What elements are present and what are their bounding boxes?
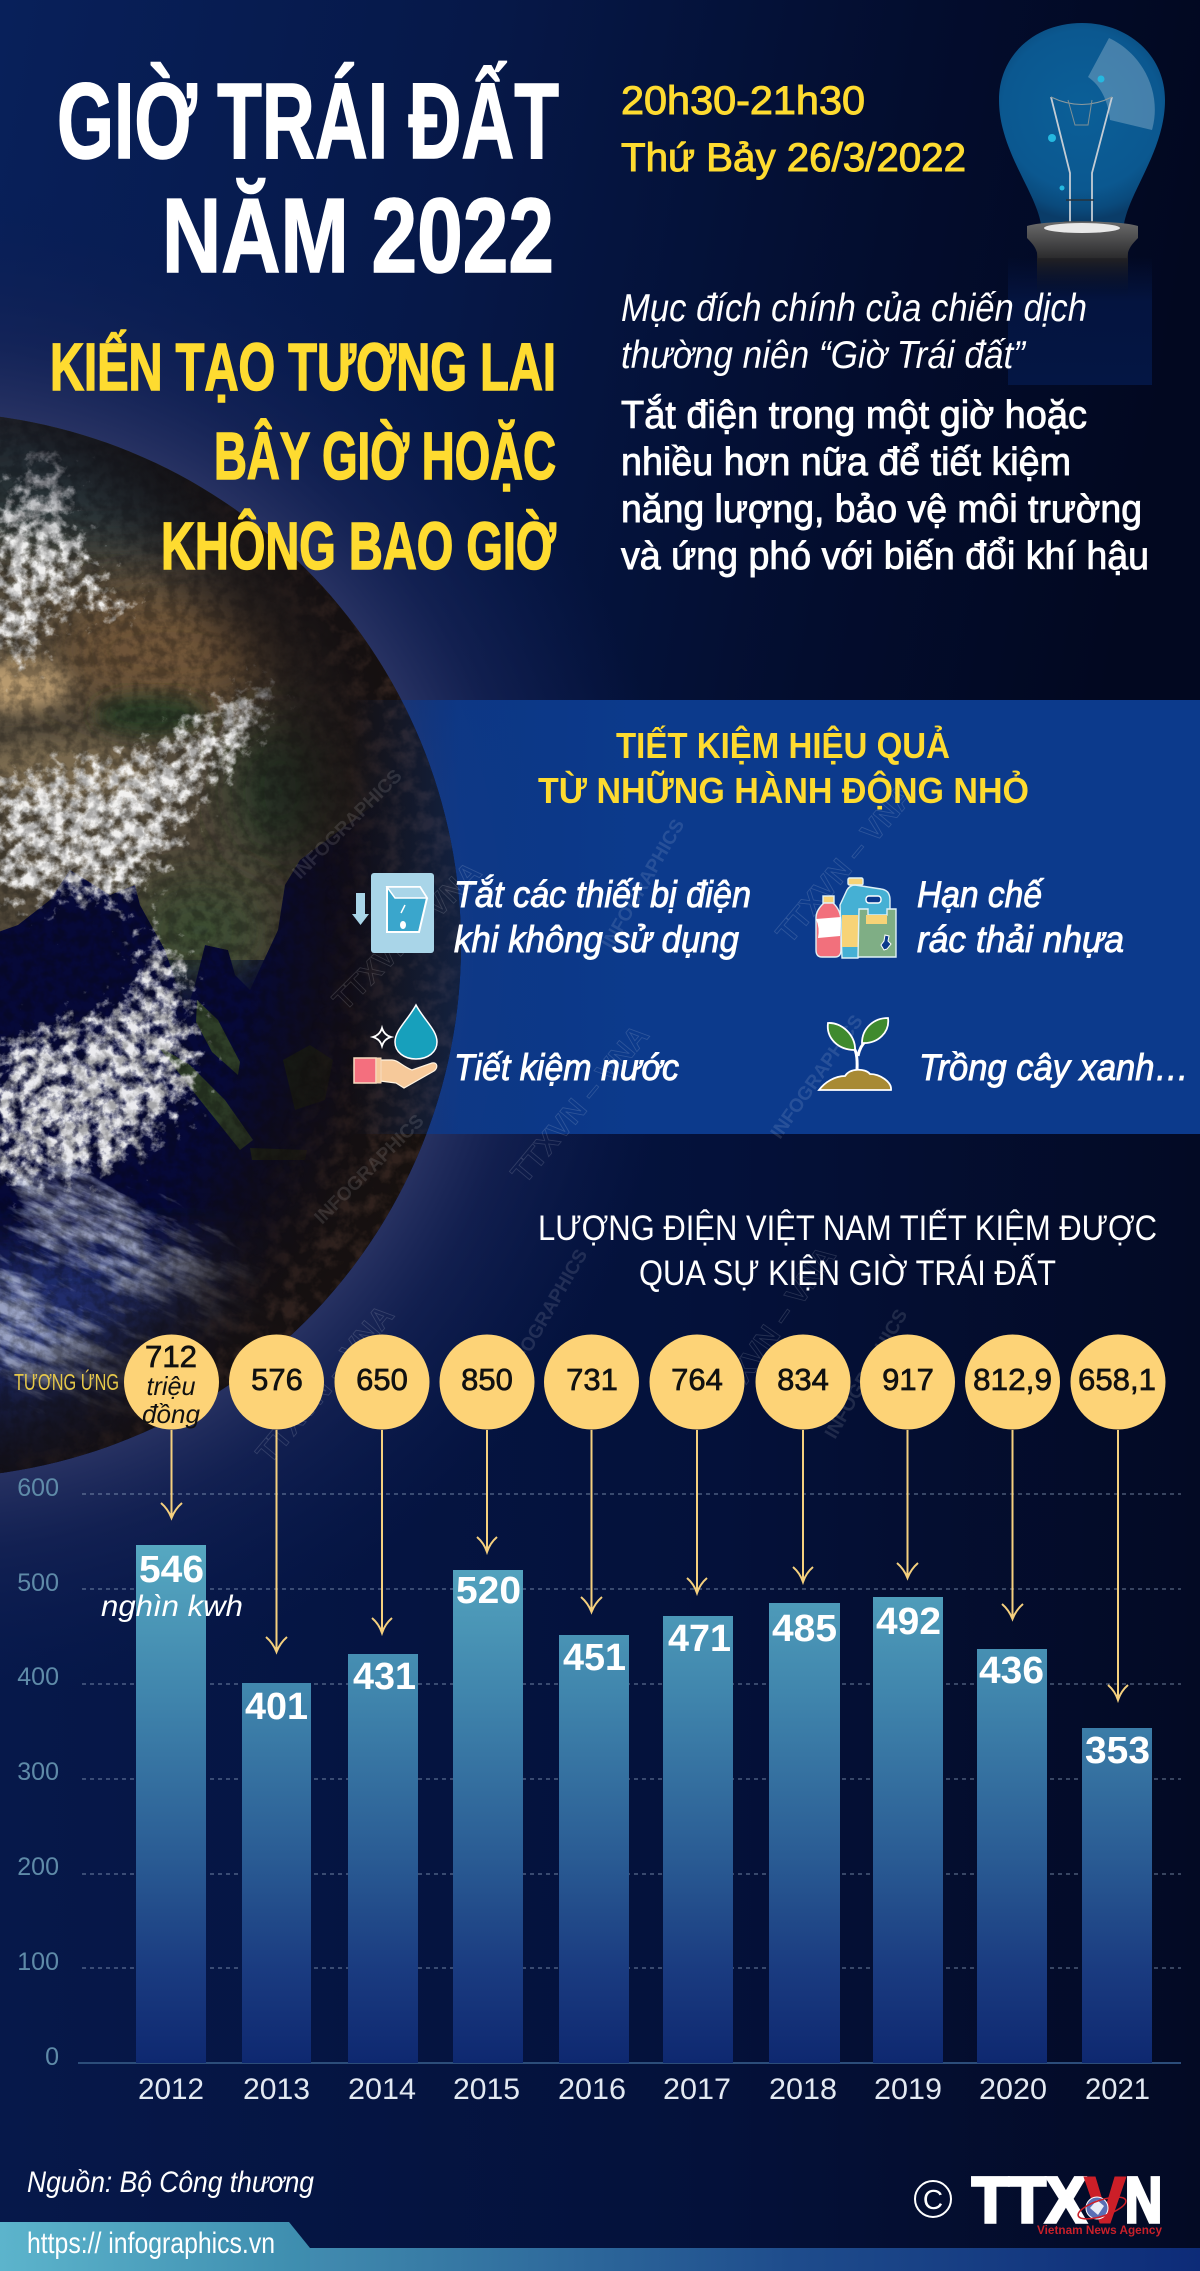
chart title: QUA SỰ KIỆN GIỜ TRÁI ĐẤT <box>639 1253 1056 1293</box>
circle: 2018: 834 <box>777 1362 829 1397</box>
circle: 2017: 764 <box>671 1362 723 1397</box>
y axis labels: 600 <box>17 1474 59 1502</box>
x axis years: 2019 <box>874 2073 942 2106</box>
logo: TTXVN: TTX <box>972 2164 1086 2236</box>
footer bar: https:// infographics.vn <box>27 2227 275 2260</box>
text: switch off devices: khi không sử dụng <box>454 919 739 960</box>
bar: 2015 <box>453 1570 523 2063</box>
unit label: nghìn kwh <box>101 1590 243 1623</box>
campaign purpose text: và ứng phó với biến đổi khí hậu <box>621 535 1149 578</box>
bar: 2019 <box>873 1597 943 2063</box>
circle: 2016 <box>544 1334 639 1430</box>
circle: 2012 <box>124 1334 219 1430</box>
y axis labels: 500 <box>17 1569 59 1597</box>
bar: 2012 <box>136 1545 206 2063</box>
bar: 2020 <box>977 1649 1047 2063</box>
circle: 2013 <box>229 1334 324 1430</box>
bar: 2019: 492 <box>876 1601 941 1643</box>
subtitle: KHÔNG BAO GIỜ <box>161 509 557 584</box>
x axis years: 2014 <box>348 2073 416 2106</box>
value circles <box>124 1334 1166 1430</box>
earth globe <box>0 400 480 1509</box>
bar: 2013 <box>242 1683 311 2063</box>
bar: 2018: 485 <box>772 1608 837 1650</box>
x axis years: 2018 <box>769 2073 837 2106</box>
text: switch off devices: Tắt các thiết bị điện <box>454 874 751 915</box>
watermarks: INFOGRAPHICS <box>501 1246 592 1382</box>
y axis labels: 0 <box>45 2043 59 2071</box>
x axis years: 2015 <box>453 2073 520 2106</box>
icon: power switch <box>352 873 434 953</box>
circle: 2012: đồng <box>142 1399 201 1429</box>
watermarks <box>250 766 921 1469</box>
circle: 2013: 576 <box>251 1362 303 1397</box>
circle: 2020 <box>965 1334 1060 1430</box>
cloud masses <box>0 440 285 1200</box>
bar: 2017: 471 <box>668 1618 731 1660</box>
title: NĂM 2022 <box>162 177 554 295</box>
text: limit plastic waste: Hạn chế <box>917 874 1044 915</box>
panel: tips band overlay <box>0 700 1200 1134</box>
Malay peninsula and Indonesian islands <box>157 1000 333 1160</box>
watermarks: TTXVN – VNA <box>250 1299 401 1469</box>
circle: 2021: 658,1 <box>1078 1362 1156 1397</box>
bar: 2020: 436 <box>979 1650 1044 1692</box>
circle: 2014 <box>334 1334 430 1430</box>
bar: 2014: 431 <box>353 1656 416 1698</box>
circle: 2015: 850 <box>461 1362 513 1397</box>
circle: 2012: triệu <box>146 1371 196 1401</box>
subtitle: BÂY GIỜ HOẶC <box>214 419 556 494</box>
watermarks: TTXVN – VNA <box>505 1019 656 1189</box>
circle: 2015 <box>440 1334 534 1430</box>
text: save water: Tiết kiệm nước <box>454 1047 679 1088</box>
panel: tips band background <box>0 700 1200 1134</box>
chart title <box>538 1208 1157 1293</box>
bar: 2016 <box>559 1635 629 2063</box>
text: plant trees: Trồng cây xanh… <box>919 1047 1189 1088</box>
campaign purpose lead <box>621 287 1087 377</box>
date and time: Thứ Bảy 26/3/2022 <box>621 136 966 180</box>
x axis years: 2016 <box>558 2073 626 2106</box>
watermarks: INFOGRAPHICS <box>598 816 689 952</box>
footer bar <box>0 2222 1200 2271</box>
text: switch off devices <box>454 874 751 960</box>
campaign purpose text: nhiều hơn nữa để tiết kiệm <box>621 441 1071 484</box>
grid lines <box>82 1494 1181 1968</box>
source: Nguồn: Bộ Công thương <box>27 2166 314 2199</box>
logo: TTXVN: V <box>1085 2164 1125 2236</box>
label: equivalent value: TƯƠNG ỨNG <box>14 1369 119 1395</box>
campaign purpose text: Tắt điện trong một giờ hoặc <box>621 394 1087 437</box>
watermarks: INFOGRAPHICS <box>289 766 407 884</box>
date and time: 20h30-21h30 <box>621 79 865 123</box>
campaign purpose text: năng lượng, bảo vệ môi trường <box>621 488 1142 531</box>
x axis years: 2013 <box>243 2073 310 2106</box>
circle: 2016: 731 <box>566 1362 618 1397</box>
bar: 2016: 451 <box>563 1637 626 1679</box>
logo: TTXVN <box>915 2164 1163 2237</box>
circle: 2018 <box>756 1334 850 1430</box>
heading: tips: TỪ NHỮNG HÀNH ĐỘNG NHỎ <box>538 769 1029 811</box>
x axis years: 2021 <box>1085 2073 1150 2106</box>
bar: 2015: 520 <box>456 1570 521 1612</box>
bar: 2021 <box>1082 1728 1152 2063</box>
watermarks: TTXVN – VNA <box>704 1240 843 1419</box>
y axis labels <box>17 1474 59 2071</box>
circle: 2021 <box>1070 1334 1166 1430</box>
circle: 2014: 650 <box>356 1362 408 1397</box>
logo: TTXVN: Vietnam News Agency <box>1037 2225 1163 2237</box>
bar: 2021: 353 <box>1085 1730 1150 1772</box>
y axis labels: 300 <box>17 1758 59 1786</box>
circle: 2017 <box>650 1334 744 1430</box>
y axis labels: 200 <box>17 1853 59 1881</box>
x axis years <box>138 2073 1150 2106</box>
icon: plastic waste <box>816 878 896 958</box>
watermarks: INFOGRAPHICS <box>311 1111 429 1229</box>
icon: light bulb <box>999 23 1165 385</box>
campaign purpose lead: thường niên “Giờ Trái đất” <box>621 334 1027 377</box>
circle: 2019 <box>860 1334 955 1430</box>
circle: 2020: 812,9 <box>973 1362 1052 1397</box>
heading: tips: TIẾT KIỆM HIỆU QUẢ <box>616 724 950 766</box>
bar: 2017 <box>663 1616 733 2063</box>
bar: 2014 <box>348 1654 418 2063</box>
y axis labels: 100 <box>17 1948 59 1976</box>
circle: 2019: 917 <box>882 1362 934 1397</box>
bar: 2012: 546 <box>139 1549 204 1591</box>
x axis years: 2020 <box>979 2073 1047 2106</box>
campaign purpose text <box>621 394 1149 578</box>
title <box>57 60 559 295</box>
date and time <box>621 79 966 180</box>
y axis labels: 400 <box>17 1663 59 1691</box>
watermarks: TTXVN – VNA <box>770 779 921 949</box>
subtitle <box>50 330 557 584</box>
watermarks: INFOGRAPHICS <box>767 1011 868 1143</box>
arrows from circles to bars <box>161 1430 1128 1700</box>
text: limit plastic waste: rác thải nhựa <box>917 919 1124 960</box>
x axis years: 2012 <box>138 2073 204 2106</box>
watermarks: TTXVN – VNA <box>327 856 488 1017</box>
logo: TTXVN: N <box>1125 2164 1162 2236</box>
subtitle: KIẾN TẠO TƯƠNG LAI <box>50 330 556 405</box>
logo: TTXVN: C <box>923 2184 943 2215</box>
bar chart <box>78 1545 1181 2063</box>
circle: 2012: 712 <box>145 1339 197 1374</box>
campaign purpose lead: Mục đích chính của chiến dịch <box>621 287 1087 330</box>
x axis years: 2017 <box>663 2073 731 2106</box>
icon: water saving <box>354 1005 437 1088</box>
icon: plant <box>819 1018 891 1090</box>
title: GIỜ TRÁI ĐẤT <box>57 60 559 181</box>
watermarks: INFOGRAPHICS <box>821 1306 912 1442</box>
bar: 2018 <box>769 1603 840 2063</box>
heading: tips <box>538 724 1029 811</box>
bar: 2013: 401 <box>245 1686 308 1728</box>
text: limit plastic waste <box>917 874 1124 960</box>
